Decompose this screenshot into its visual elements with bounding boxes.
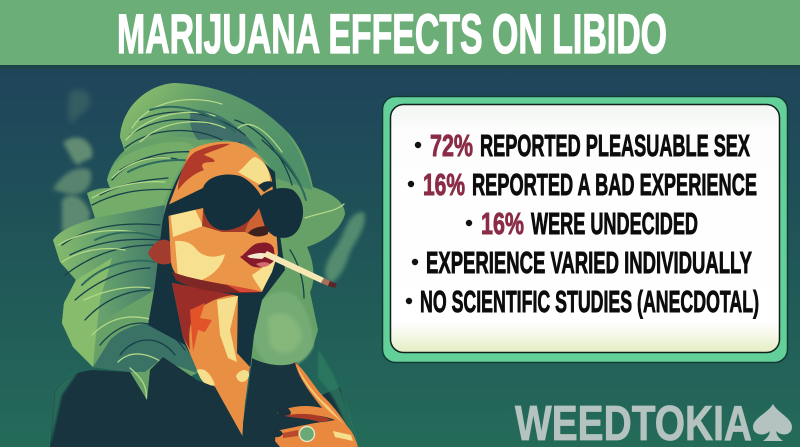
dark under-hair shadow: [148, 142, 285, 380]
hair: lower lobe: [53, 205, 165, 347]
panel: key findings: [382, 96, 788, 362]
face: [168, 142, 278, 293]
nose shadow: [248, 226, 268, 237]
smoke cloud beside neck: [252, 292, 313, 368]
smoke: wisp from the cigarette: [325, 212, 365, 284]
hair: middle lobe: [87, 142, 193, 218]
ring: [300, 426, 314, 442]
smoke: wisps left of the hair: [53, 90, 93, 232]
finding: 16% undecided: [466, 206, 698, 241]
jacket shoulder glow: [50, 350, 358, 447]
neck and chest: [172, 283, 250, 437]
lips: [240, 242, 275, 267]
finding: 72% pleasurable: 72%: [430, 128, 473, 163]
finding: 16% bad experience: 16%: [423, 167, 465, 202]
hand with ring: [272, 362, 358, 447]
hair: dark crown fold: [190, 110, 258, 150]
jacket: [50, 357, 358, 447]
cigarette: [263, 251, 337, 288]
hair: [53, 83, 345, 400]
ear: [148, 240, 173, 264]
portrait: woman with green hair smoking: [50, 83, 358, 447]
icon: spade: [753, 404, 792, 441]
hair: top lobe: [120, 83, 312, 190]
sunglasses: [168, 174, 303, 238]
header banner: [0, 0, 800, 69]
finding: 16% undecided: 16%: [481, 206, 524, 241]
hair: shaded curl at neck: [93, 324, 197, 373]
